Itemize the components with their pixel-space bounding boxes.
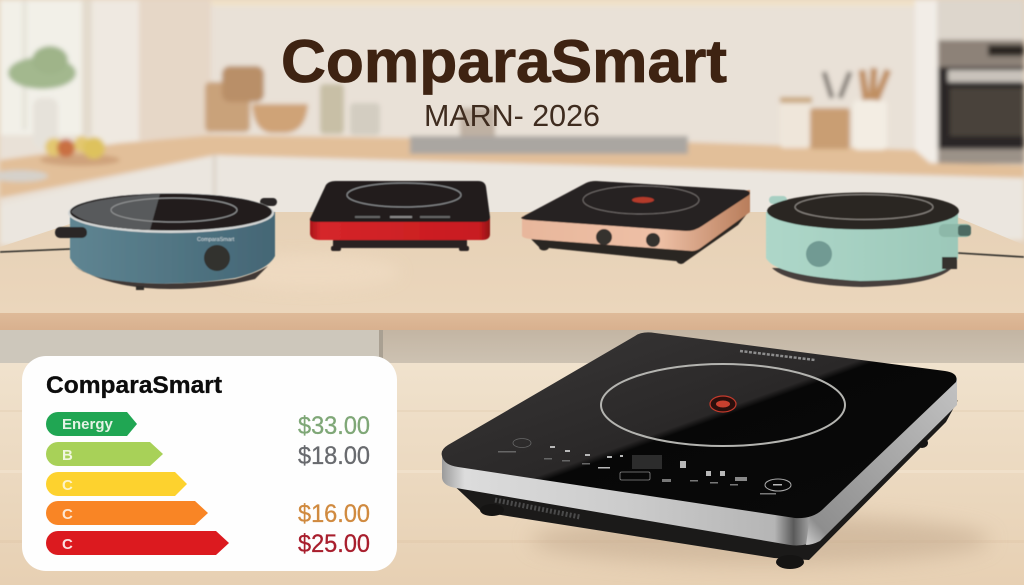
energy bar: red: C	[62, 536, 73, 553]
energy bar: green	[46, 412, 137, 436]
energy bar: green: Energy	[62, 416, 114, 433]
burner ring	[601, 364, 845, 446]
cooker: mint round	[766, 192, 1024, 287]
energy bar: yellow: C	[62, 477, 73, 494]
energy bar: red	[46, 531, 229, 555]
foreground table	[0, 363, 1024, 585]
energy bar: lime: B	[62, 447, 73, 464]
cooker: red square	[310, 181, 490, 251]
cooker: copper square	[521, 181, 750, 264]
price: orange: $16.00	[298, 500, 370, 528]
kitchen background	[0, 0, 1024, 245]
hero induction cooktop	[442, 332, 990, 569]
title: ComparaSmart	[281, 28, 727, 95]
energy bar: yellow	[46, 472, 187, 496]
card heading: ComparaSmart	[46, 372, 222, 399]
back counter	[0, 212, 1024, 364]
cooker: teal round	[0, 193, 277, 290]
price: green: $33.00	[298, 412, 370, 440]
logo strip	[740, 351, 815, 360]
price: red: $25.00	[298, 530, 370, 558]
burner centre mark	[710, 396, 736, 412]
cooker: teal round: ComparaSmart	[197, 237, 235, 243]
price: grey: $18.00	[298, 442, 370, 470]
date subtitle: MARN- 2026	[424, 98, 600, 133]
control panel	[498, 438, 791, 494]
energy bar: lime	[46, 442, 163, 466]
energy card panel	[22, 356, 397, 571]
energy bar: orange	[46, 501, 208, 525]
energy bar: orange: C	[62, 506, 73, 523]
